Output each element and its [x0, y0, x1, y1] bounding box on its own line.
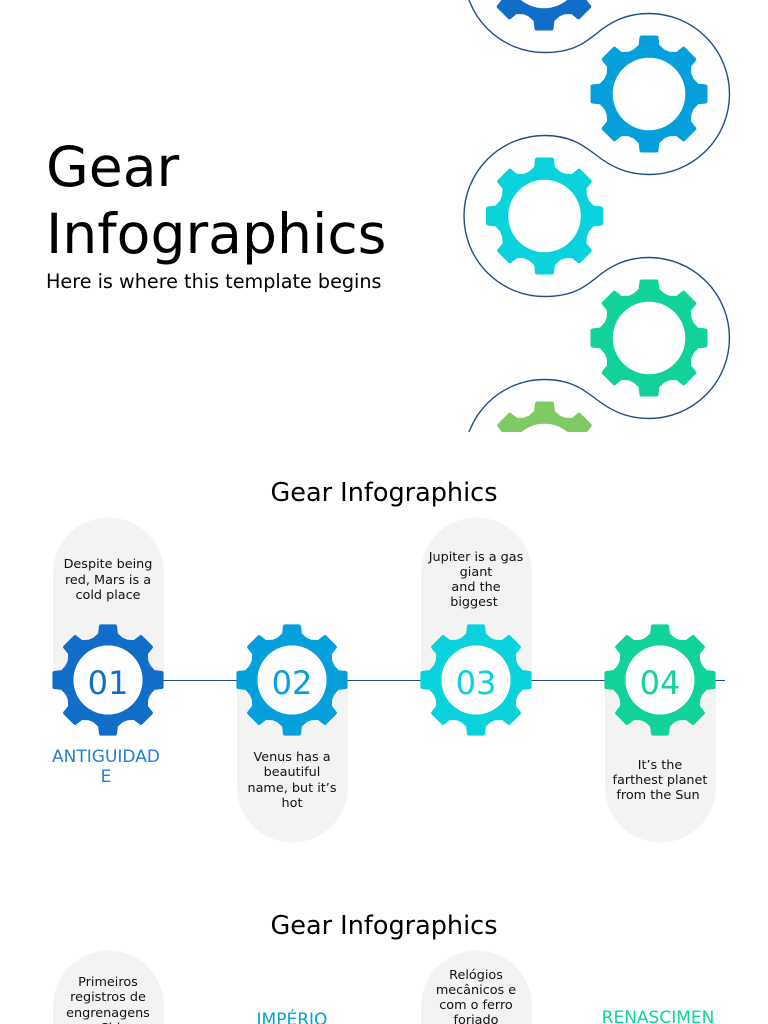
label: Antiguidade: E	[101, 767, 111, 787]
text: Venus: beautiful	[264, 765, 320, 780]
text: Mars: Despite being	[64, 557, 152, 572]
label: Antiguidade	[52, 747, 160, 787]
text: first records	[66, 975, 150, 1024]
text: clocks	[436, 968, 516, 1024]
gear: cyan	[488, 160, 601, 272]
text: first records: Primeiros	[78, 975, 138, 990]
pill 4 background	[605, 680, 716, 842]
text: first records: engrenagens	[66, 1006, 150, 1021]
text: Sun: from the Sun	[616, 788, 700, 803]
text: Venus: name, but it’s	[247, 781, 337, 796]
gear 04	[606, 626, 714, 734]
gear: teal	[592, 282, 706, 394]
gear chain illustration	[463, 0, 730, 432]
pill 3 background	[421, 518, 532, 680]
text: Venus: hot	[282, 796, 302, 811]
text: Mars	[64, 557, 152, 603]
label: Antiguidade: ANTIGUIDAD	[52, 747, 160, 767]
title	[46, 136, 386, 267]
title: Gear	[46, 136, 180, 200]
gear 01	[54, 626, 162, 734]
text: Jupiter	[428, 550, 524, 610]
text: clocks: Relógios	[449, 968, 503, 983]
panel: timeline 2	[53, 951, 714, 1024]
text: Mars: red, Mars is a	[65, 573, 151, 588]
text: clocks: mecânicos e	[436, 983, 516, 998]
text: Sun	[613, 758, 707, 803]
gear 01: 01	[88, 664, 128, 702]
text: Venus	[247, 750, 337, 811]
pill 2 background	[237, 680, 348, 842]
connector line	[108, 680, 725, 682]
text: Jupiter: giant	[460, 565, 492, 580]
title: Infographics	[46, 203, 386, 267]
text: clocks: com o ferro	[439, 998, 513, 1013]
text: Mars: cold place	[75, 588, 141, 603]
gear 04: 04	[640, 664, 680, 702]
chain outline	[464, 0, 730, 460]
text: Sun: It’s the	[638, 758, 682, 773]
pill 3 background	[421, 951, 532, 1024]
subtitle: Here is where this template begins	[46, 270, 382, 293]
heading: timeline 2: Gear Infographics	[271, 911, 497, 941]
text: Sun: farthest planet	[613, 773, 707, 788]
text: Jupiter: biggest	[450, 595, 498, 610]
text: first records: registros de	[70, 990, 146, 1005]
gear 02: 02	[272, 664, 312, 702]
gear 03: 03	[456, 664, 496, 702]
gear: dark blue	[496, 0, 592, 30]
gear: green	[497, 402, 592, 432]
gear 02	[238, 626, 346, 734]
gear: blue	[592, 38, 706, 150]
panel: timeline 1	[52, 518, 725, 842]
text: Venus: Venus has a	[253, 750, 331, 765]
pill 1 background	[53, 518, 164, 680]
text: Jupiter: Jupiter is a gas	[428, 550, 524, 565]
text: Jupiter: and the	[451, 580, 501, 595]
pill 1 background	[53, 951, 164, 1024]
gear 03	[422, 626, 530, 734]
heading: timeline 1: Gear Infographics	[271, 478, 497, 508]
